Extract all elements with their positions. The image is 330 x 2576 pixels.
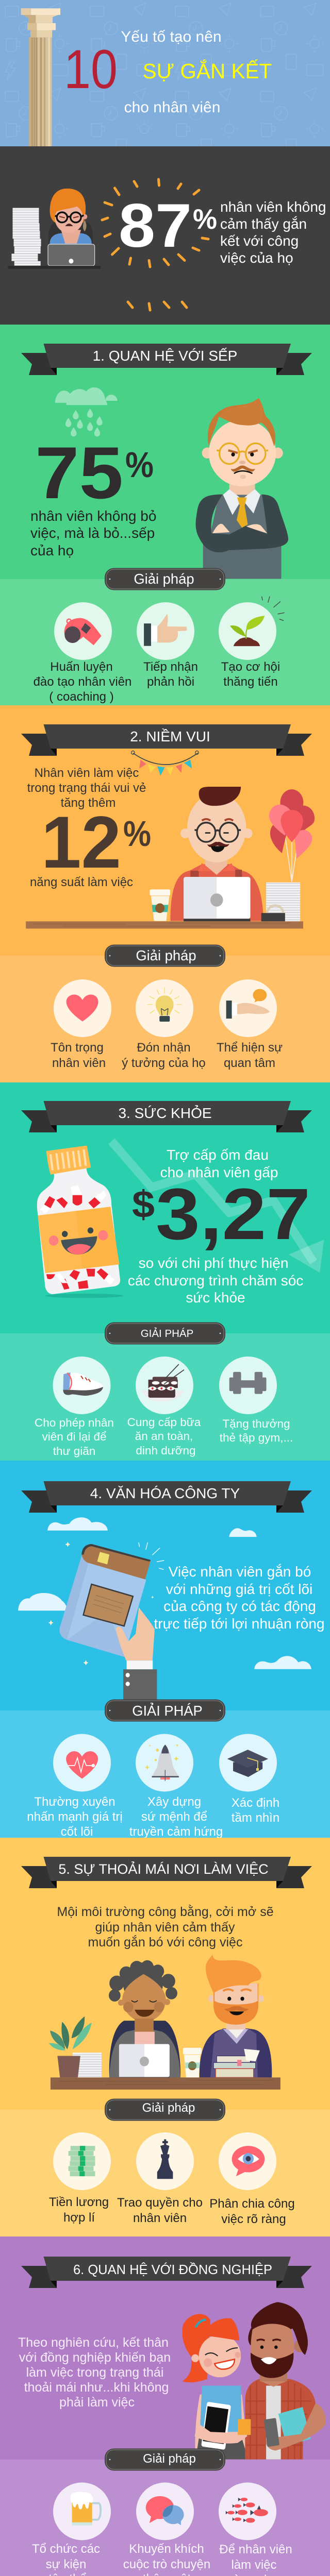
solution labels [51, 1041, 283, 1070]
panel: 1. quan he voi sep [0, 325, 330, 705]
solution labels: Tặng thưởng [222, 1417, 290, 1430]
text: niem vui: năng suất làm việc [30, 875, 133, 889]
heading ribbon [21, 1101, 312, 1132]
icon: orange burst rays [102, 179, 208, 310]
big number 75%: % [125, 445, 154, 485]
solution labels: Tôn trọng [51, 1041, 104, 1055]
solution labels: thẻ tập gym,... [220, 1431, 293, 1444]
heading ribbon [21, 1857, 312, 1888]
big number 12%: 12 [41, 802, 121, 884]
text: van hoa cong ty: với những giá trị cốt lõi [166, 1581, 312, 1597]
title: cho nhân viên [124, 99, 220, 116]
solution badge: GIẢI PHÁP [141, 1328, 193, 1340]
text: suc khoe detail: so với chi phí thực hiện [139, 1255, 288, 1271]
illustration: pill bottle [37, 1146, 123, 1298]
solution labels [49, 2195, 295, 2226]
text: dong nghiep: làm việc trong trạng thái [26, 2365, 163, 2380]
illustration: colleagues at desk [49, 1955, 280, 2090]
icon circle: speech bubbles [136, 2482, 194, 2540]
panel: 2. niem vui [0, 705, 330, 1082]
solution labels: Xây dựng [147, 1795, 201, 1809]
solution labels: Thường xuyên [34, 1795, 116, 1809]
text: 87 percent description: cảm thấy gắn [220, 216, 307, 232]
solution labels: truyền cảm hứng [129, 1825, 223, 1839]
solution labels: quan tâm [224, 1056, 275, 1070]
icon circle: pointing hand [137, 602, 194, 660]
panel: header [0, 0, 330, 146]
solution badge: Giải pháp [136, 947, 196, 963]
icon circle: heartbeat [53, 1734, 111, 1792]
solution badge: GIẢI PHÁP [132, 1702, 203, 1719]
text: suc khoe intro: cho nhân viên gấp [160, 1164, 278, 1180]
solution labels: Tổ chức các [32, 2542, 100, 2556]
big number 75%: 75 [35, 432, 123, 514]
solution labels: Cho phép nhân [35, 1416, 114, 1429]
solution labels: Tiền lương [49, 2195, 109, 2209]
icon circle: chess king [136, 2132, 194, 2190]
solution labels: Xác định [232, 1796, 279, 1810]
text: dong nghiep: phải làm việc [59, 2395, 135, 2410]
solution labels: sự kiện [46, 2557, 86, 2571]
text: 87 percent description [220, 199, 326, 266]
text: niem vui: tăng thêm [61, 796, 116, 810]
solution labels: ( coaching ) [49, 690, 114, 704]
text: van hoa cong ty: Việc nhân viên gắn bó [169, 1564, 311, 1580]
panel: 4. van hoa cong ty [0, 1461, 330, 1839]
text: dong nghiep: với đồng nghiệp khiến bạn [19, 2350, 171, 2365]
title [64, 28, 272, 116]
solution labels: Khuyến khích [129, 2542, 204, 2556]
panel: 5. su thoai mai noi lam viec [0, 1838, 330, 2236]
icon circle: caring hand [219, 979, 277, 1037]
icon circle: light bulb [136, 979, 193, 1037]
heading ribbon [21, 724, 312, 756]
solution labels: Để nhân viên [219, 2543, 292, 2556]
text: niem vui: trong trạng thái vui vẻ [27, 781, 146, 795]
heading ribbon: 2. NIỀM VUI [130, 728, 210, 744]
solution labels: dinh dưỡng [136, 1444, 196, 1457]
text: thoai mai: Mội môi trường công bằng, cởi mở sẽ [57, 1904, 274, 1919]
text: dong nghiep [18, 2335, 171, 2410]
big number 75% [35, 432, 154, 514]
illustration: hand holding book [48, 1542, 164, 1700]
solution labels: thăng tiến [223, 675, 278, 689]
illustration: tired employee at laptop [8, 189, 101, 269]
title: 10 [64, 38, 118, 100]
solution badge: Giải pháp [143, 2452, 196, 2466]
icon circle: beer mug [53, 2482, 111, 2540]
solution labels: Cung cấp bữa [127, 1416, 201, 1429]
solution labels: Tạo cơ hội [221, 660, 280, 674]
text: suc khoe detail: các chương trình chăm sóc [128, 1273, 303, 1289]
icon: rain cloud [55, 387, 118, 436]
text: 87 percent description: kết với công [220, 233, 299, 249]
solution labels [27, 1795, 279, 1839]
solution labels: phản hồi [147, 675, 194, 689]
text: 75 percent description: nhân viên không bỏ [30, 508, 156, 524]
text: van hoa cong ty: của công ty có tác động [163, 1598, 316, 1614]
solution labels: Phân chia công [209, 2197, 295, 2211]
heading ribbon: 6. QUAN HỆ VỚI ĐỒNG NGHIỆP [73, 2262, 272, 2277]
panel: 6. quan he voi dong nghiep [0, 2236, 330, 2576]
heading ribbon [21, 2257, 312, 2288]
icon: clouds [18, 1517, 311, 1669]
big number $3,27: $ [132, 1183, 155, 1226]
illustration: angry boss [196, 398, 288, 579]
icon circle: eye bubble [219, 2132, 276, 2190]
solution labels: nhân viên [133, 2211, 187, 2225]
text: thoai mai: giúp nhân viên cảm thấy [95, 1920, 235, 1935]
text: niem vui: Nhân viên làm việc [35, 766, 139, 780]
solution badge [105, 945, 225, 967]
icon circle: school of fish [219, 2482, 276, 2540]
solution labels: làm việc [231, 2558, 277, 2572]
text: 87 percent description: việc của họ [220, 250, 293, 266]
heading ribbon: 5. SỰ THOẢI MÁI NƠI LÀM VIỆC [58, 1860, 269, 1877]
solution badge [105, 568, 225, 590]
text: dong nghiep: thoải mái như...khi không [24, 2380, 169, 2395]
icon circle: running shoe [53, 1357, 110, 1414]
text: thoai mai [57, 1904, 274, 1950]
big number $3,27: 3,27 [156, 1173, 310, 1255]
title: Yếu tố tạo nên [121, 28, 222, 45]
text: 87 percent description: nhân viên không [220, 199, 326, 215]
big number 87% [119, 191, 217, 260]
solution badge [105, 2448, 225, 2471]
solution labels: hợp lí [63, 2211, 95, 2225]
solution labels: ý tưởng của họ [122, 1056, 206, 1070]
title: SỰ GẮN KẾT [143, 59, 272, 83]
text: suc khoe detail: sức khỏe [186, 1290, 245, 1306]
solution labels [35, 1416, 293, 1458]
illustration: two coworkers [182, 2302, 326, 2460]
illustration: happy employee at desk [26, 787, 315, 928]
text: 75 percent description: của họ [30, 543, 74, 558]
solution labels: Huấn luyện [50, 660, 113, 674]
solution badge [105, 1322, 225, 1345]
icon: falling arrow [111, 1141, 324, 1273]
solution badge: Giải pháp [142, 2101, 195, 2115]
solution badge [105, 2099, 225, 2121]
text: van hoa cong ty: trực tiếp tới lợi nhuận ròng [154, 1616, 324, 1632]
panel: 3. suc khoe [0, 1082, 330, 1461]
icon: greek column [21, 8, 60, 146]
solution badge: Giải pháp [134, 571, 194, 587]
text: 75 percent description [30, 508, 156, 558]
big number 87%: % [193, 203, 217, 235]
icon circle: dumbbell [219, 1357, 277, 1414]
solution labels: đào tạo nhân viên [34, 675, 131, 689]
solution labels: cuộc trò chuyện [123, 2557, 210, 2571]
panel: 87 percent statistic [0, 146, 330, 325]
text: thoai mai: muốn gắn bó với công việc [88, 1935, 242, 1950]
icon circle: sprout [219, 597, 285, 660]
solution labels: Trao quyền cho [117, 2196, 203, 2210]
solution labels: sứ mệnh để [141, 1810, 207, 1824]
solution badge [105, 1699, 225, 1722]
icon circle: money stack [53, 2132, 111, 2190]
text: dong nghiep: Theo nghiên cứu, kết thân [18, 2335, 169, 2350]
text: suc khoe intro [160, 1147, 278, 1180]
icon circle: space shuttle [136, 1734, 193, 1792]
solution labels: việc rõ ràng [221, 2212, 286, 2226]
heading ribbon: 4. VĂN HÓA CÔNG TY [90, 1485, 240, 1501]
text: niem vui [27, 766, 146, 889]
solution labels: viên đi lại để [42, 1430, 107, 1443]
solution labels: ăn an toàn, [135, 1430, 193, 1443]
solution labels: Đón nhận [137, 1041, 191, 1055]
solution labels: cốt lõi [61, 1825, 93, 1839]
solution labels: thư giãn [53, 1445, 95, 1458]
icon: bunting [131, 751, 199, 776]
text: 75 percent description: việc, mà là bỏ...sếp [30, 525, 155, 541]
solution labels: tầm nhìn [232, 1811, 279, 1825]
solution labels: nhấn mạnh giá trị [27, 1810, 123, 1824]
big number 87%: 87 [119, 191, 192, 260]
solution labels: Tiếp nhận [143, 660, 198, 674]
solution labels: nhân viên [52, 1056, 106, 1070]
text: suc khoe intro: Trợ cấp ốm đau [167, 1147, 269, 1163]
heading ribbon [21, 1481, 312, 1513]
solution labels: Thể hiện sự [217, 1041, 283, 1055]
text: van hoa cong ty [154, 1564, 324, 1632]
text: suc khoe detail [128, 1255, 303, 1306]
icon circle: heart [54, 979, 111, 1037]
icon circle: sushi plate [136, 1357, 193, 1414]
icon circle: graduation cap [219, 1734, 277, 1792]
icon circle: whistle [54, 602, 112, 660]
big number 12%: % [123, 814, 151, 854]
heading ribbon [21, 344, 312, 375]
heading ribbon: 3. SỨC KHỎE [118, 1105, 212, 1121]
heading ribbon: 1. QUAN HỆ VỚI SẾP [93, 348, 237, 364]
solution labels [32, 2542, 292, 2576]
solution labels [34, 660, 280, 704]
